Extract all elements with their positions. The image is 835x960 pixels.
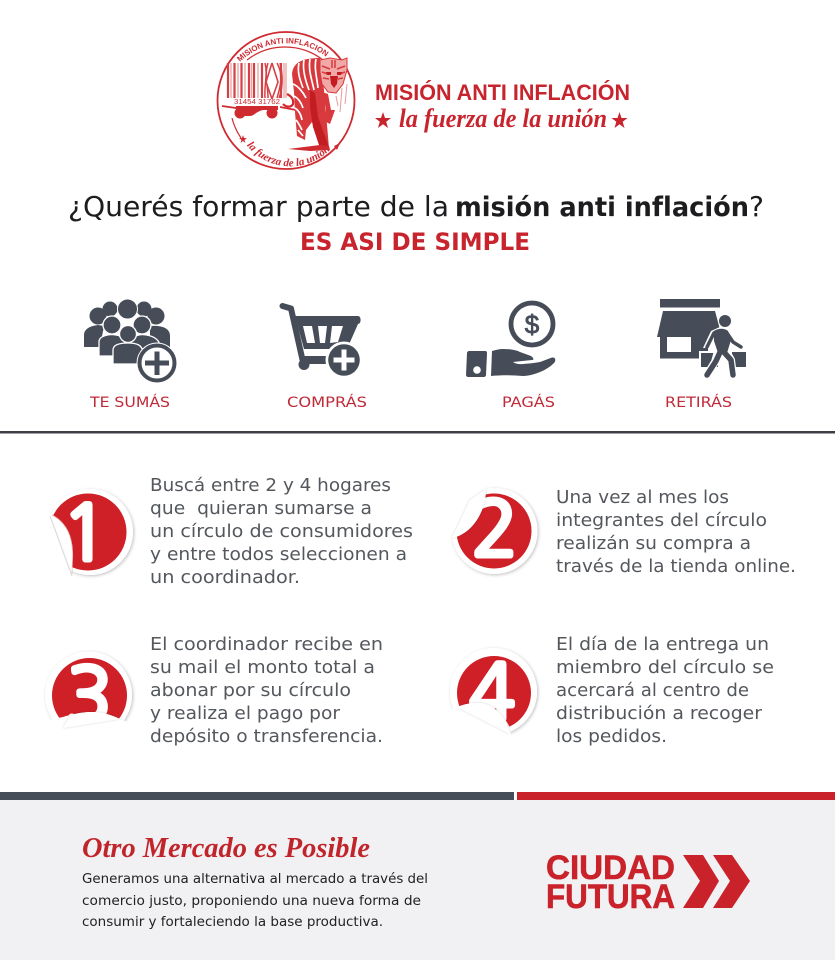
tiger: [288, 58, 347, 151]
step labels: [89, 394, 732, 411]
step 2 text: través de la tienda online.: [556, 557, 796, 577]
step 1 text: que quieran sumarse a: [150, 499, 372, 519]
sticker badge 2: 2: [472, 491, 518, 567]
logo: circular tiger stamp: MISION ANTI INFLACION: [236, 38, 329, 62]
main heading: ¿Querés formar parte de la: [68, 191, 449, 223]
step 3 text: y realiza el pago por: [150, 704, 341, 724]
logo wordmark: MISIÓN ANTI INFLACIÓN: [375, 80, 630, 105]
step 2 text: Una vez al mes los: [556, 488, 729, 508]
sticker badge 3: 3: [66, 657, 112, 733]
step 4 text: los pedidos.: [556, 727, 667, 747]
icon: hand with coin: $: [525, 310, 540, 340]
step 2 text: [556, 488, 796, 577]
logo: circular tiger stamp: [216, 31, 356, 170]
barcode wagon: 31454 31762: [234, 97, 280, 106]
logo: circular tiger stamp: la fuerza de la unión: [246, 141, 330, 166]
step 3 text: El coordinador recibe en: [150, 635, 383, 655]
step 1 text: Buscá entre 2 y 4 hogares: [150, 476, 391, 496]
step 4 text: distribución a recoger: [556, 704, 763, 724]
footer text: comercio justo, proponiendo una nueva forma de: [82, 894, 421, 909]
step 1 text: y entre todos seleccionen a: [150, 545, 407, 565]
logo wordmark: [375, 80, 630, 133]
main heading: misión anti inflación: [455, 192, 749, 223]
step 3 text: abonar por su círculo: [150, 681, 351, 701]
step 2 text: realizán su compra a: [556, 534, 751, 554]
step 3 text: su mail el monto total a: [150, 658, 375, 678]
footer text: Generamos una alternativa al mercado a través del: [82, 871, 428, 887]
subheading: ES ASI DE SIMPLE: [300, 228, 530, 256]
step 4 text: miembro del círculo se: [556, 658, 774, 678]
step 1 text: un coordinador.: [150, 568, 300, 588]
step 4 text: [556, 635, 774, 747]
sticker badge 3: [40, 652, 135, 745]
step labels: TE SUMÁS: [89, 394, 170, 411]
step 3 text: depósito o transferencia.: [150, 727, 383, 747]
sticker badge 4: 4: [469, 654, 515, 730]
icon: hand with coin: [466, 303, 555, 377]
icon: shop and person with bags: [657, 299, 746, 375]
footer text: consumir y fortaleciendo la base productiva.: [82, 915, 383, 930]
step 1 text: [150, 476, 413, 588]
footer heading: Otro Mercado es Posible: [82, 832, 370, 864]
step 4 text: acercará al centro de: [556, 681, 749, 701]
step 1 text: un círculo de consumidores: [150, 522, 413, 542]
icon: group of people with plus: [84, 299, 178, 384]
Ciudad Futura logo: CIUDAD: [546, 849, 675, 887]
logo wordmark: la fuerza de la unión: [399, 104, 607, 133]
sticker badge 2: [440, 480, 538, 574]
footer text: [82, 871, 428, 930]
main heading: ?: [749, 191, 764, 223]
Ciudad Futura logo: [546, 849, 750, 916]
step 3 text: [150, 635, 383, 747]
panel: four process steps icons: [84, 299, 746, 384]
sticker badge 1: 1: [62, 495, 108, 571]
step labels: RETIRÁS: [665, 394, 732, 411]
step labels: PAGÁS: [502, 394, 555, 411]
step 4 text: El día de la entrega un: [556, 635, 769, 655]
step 2 text: integrantes del círculo: [556, 511, 767, 531]
step labels: COMPRÁS: [287, 394, 367, 411]
sticker badge 1: [30, 489, 133, 595]
icon: shopping cart with plus: [282, 306, 362, 378]
sticker badge 4: [445, 648, 537, 745]
main heading: [68, 191, 764, 223]
Ciudad Futura logo: FUTURA: [546, 878, 675, 916]
panel: footer: [0, 792, 835, 960]
